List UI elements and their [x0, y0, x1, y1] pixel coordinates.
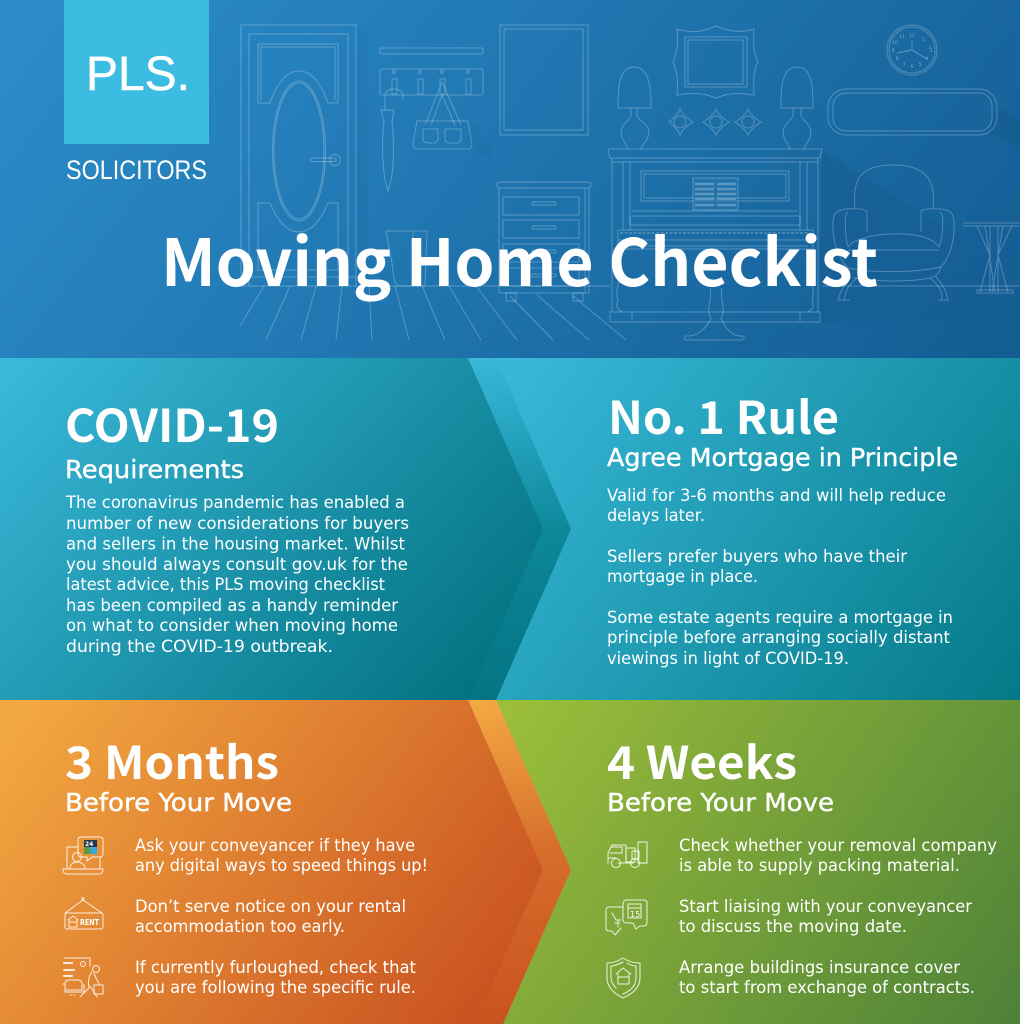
- clock numerals: 10: [892, 40, 898, 46]
- heading: COVID-19: COVID-19: [65, 390, 279, 455]
- boots: [386, 231, 427, 286]
- clock numerals: 4: [926, 56, 929, 62]
- heading: No. 1 Rule: No. 1 Rule: [608, 382, 839, 447]
- clock numerals: 1: [922, 37, 925, 43]
- logo: PLS square: PLS.: [86, 48, 190, 101]
- subheading: Before Your Move: Before Your Move: [607, 788, 834, 817]
- paragraph: COVID-19 intro: has been compiled as a handy reminder: [66, 596, 398, 615]
- text: packing material: Check whether your removal company: [679, 836, 997, 855]
- wall mirror: [500, 25, 588, 135]
- text: insurance: [679, 958, 975, 997]
- clock numerals: 3: [930, 48, 933, 54]
- long mirror: [828, 89, 997, 135]
- text: packing material: is able to supply packing material.: [679, 856, 960, 875]
- floor and boards: [240, 286, 1020, 340]
- panel: 4 Weeks background: [468, 700, 1020, 1024]
- side table: [963, 223, 1020, 293]
- panel: COVID-19 background: [0, 358, 543, 700]
- clock numerals: 6: [911, 64, 914, 70]
- text: moving date: [679, 897, 972, 936]
- clock numerals: [892, 33, 933, 70]
- panel: No. 1 Rule background: [468, 358, 1020, 700]
- paragraph: COVID-19 intro: you should always consult gov.uk for the: [66, 555, 408, 574]
- clock numerals: 5: [919, 62, 922, 68]
- text: furlough rule: [135, 958, 416, 997]
- door: [241, 25, 356, 286]
- furniture drop shadows: [356, 26, 1020, 322]
- text: insurance: Arrange buildings insurance cover: [679, 958, 960, 977]
- clock numerals: 12: [909, 33, 915, 39]
- text block: 4 Weeks: [606, 727, 997, 998]
- icon: chat with calendar: 15: [630, 910, 640, 919]
- clock numerals: 2: [929, 45, 932, 51]
- piano: [608, 149, 822, 322]
- clock numerals: 9: [892, 48, 895, 54]
- ornaments: [669, 109, 761, 135]
- title: Moving Home Checkist: [161, 211, 878, 305]
- icon: rent sign: RENT: [80, 918, 100, 927]
- chest of drawers: [497, 182, 591, 301]
- paragraph: COVID-19 intro: latest advice, this PLS moving checklist: [66, 575, 385, 594]
- icon: rent sign: [65, 898, 103, 929]
- text: moving date: to discuss the moving date.: [679, 917, 907, 936]
- paragraph: COVID-19 intro: [65, 493, 409, 656]
- subheading: Requirements: Requirements: [65, 455, 244, 484]
- icon: shield with house: [607, 958, 640, 998]
- paragraph: mortgage advice: Sellers prefer buyers who have their: [607, 547, 907, 566]
- icon: removal truck: [608, 842, 647, 868]
- subheading: Agree Mortgage in Principle: Agree Mortgage in Principle: [607, 443, 958, 472]
- armchair: [833, 165, 954, 300]
- coat rack, umbrella and bag: [380, 48, 483, 191]
- panel: 3 Months background: [0, 700, 543, 1024]
- text: conveyancer digital: any digital ways to speed things up!: [135, 856, 428, 875]
- text: rental notice: [135, 897, 406, 936]
- paragraph: COVID-19 intro: number of new considerations for buyers: [66, 514, 409, 533]
- logo: PLS square: [64, 0, 209, 144]
- text: conveyancer digital: Ask your conveyancer if they have: [135, 836, 415, 855]
- text: furlough rule: you are following the specific rule.: [135, 978, 416, 997]
- paragraph: mortgage advice: [607, 486, 953, 668]
- clock: [887, 25, 937, 75]
- paragraph: mortgage advice: mortgage in place.: [607, 567, 758, 586]
- clock numerals: 7: [903, 62, 906, 68]
- piano stool: [684, 288, 744, 340]
- clock numerals: 11: [899, 34, 905, 40]
- paragraph: mortgage advice: principle before arranging socially distant: [607, 628, 950, 647]
- paragraph: COVID-19 intro: during the COVID-19 outbreak.: [66, 637, 333, 656]
- paragraph: mortgage advice: delays later.: [607, 506, 705, 525]
- icon: person moving out: [63, 958, 103, 997]
- icon: laptop with 24-hour chat: [63, 837, 103, 874]
- panel: header banner: [0, 0, 1020, 358]
- logo: Solicitors wordmark: SOLICITORS: [66, 155, 207, 185]
- paragraph: COVID-19 intro: The coronavirus pandemic has enabled a: [65, 493, 405, 512]
- illustration: room line art: [240, 25, 1020, 340]
- paragraph: mortgage advice: viewings in light of COVID-19.: [607, 649, 849, 668]
- text: rental notice: Don’t serve notice on your rental: [135, 897, 406, 916]
- subheading: Before Your Move: Before Your Move: [65, 788, 292, 817]
- text: moving date: Start liaising with your conveyancer: [679, 897, 972, 916]
- text block: COVID-19: [65, 390, 409, 656]
- text block: No. 1 Rule: [607, 382, 958, 668]
- text: insurance: to start from exchange of contracts.: [679, 978, 975, 997]
- paragraph: mortgage advice: Some estate agents require a mortgage in: [607, 608, 953, 627]
- heading: 3 Months: 3 Months: [65, 727, 279, 792]
- icon: chat with calendar: [606, 900, 647, 935]
- icon: laptop with 24-hour chat: 24: [85, 841, 93, 848]
- text: rental notice: accommodation too early.: [135, 917, 345, 936]
- table lamps: [618, 67, 813, 149]
- paragraph: mortgage advice: Valid for 3-6 months and will help reduce: [607, 486, 946, 505]
- text block: 3 Months: [63, 727, 428, 997]
- paragraph: COVID-19 intro: and sellers in the housing market. Whilst: [66, 534, 405, 554]
- ornate picture frame: [673, 26, 758, 98]
- clock numerals: 8: [896, 56, 899, 62]
- text: conveyancer digital: [135, 836, 428, 875]
- text: packing material: [679, 836, 997, 875]
- text: furlough rule: If currently furloughed, check that: [135, 958, 416, 977]
- heading: 4 Weeks: 4 Weeks: [607, 727, 797, 792]
- paragraph: COVID-19 intro: on what to consider when moving home: [66, 616, 398, 635]
